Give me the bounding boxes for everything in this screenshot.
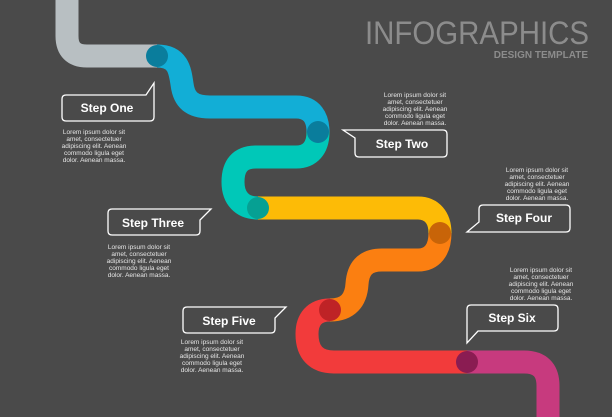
- text: step three: amet, consectetuer: [111, 251, 167, 258]
- text: step two: [383, 92, 448, 127]
- text: step six: adipiscing elit. Aenean: [509, 281, 574, 288]
- callout: Step Six: Step Six: [488, 311, 536, 325]
- text: step three: Lorem ipsum dolor sit: [108, 244, 170, 251]
- text: step five: Lorem ipsum dolor sit: [181, 339, 243, 346]
- text: step one: commodo ligula eget: [64, 150, 124, 157]
- text: step two: dolor. Aenean massa.: [384, 120, 446, 127]
- step nodes: [146, 45, 478, 373]
- text: step five: adipiscing elit. Aenean: [180, 353, 245, 360]
- text: step six: dolor. Aenean massa.: [510, 295, 572, 302]
- text: step one: Lorem ipsum dolor sit: [63, 129, 125, 136]
- text: step three: [107, 244, 172, 279]
- text: step one: [62, 129, 127, 164]
- callout: Step Five: Step Five: [202, 314, 256, 328]
- text: step three: commodo ligula eget: [109, 265, 169, 272]
- callout: Step One: [62, 83, 154, 121]
- text: step two: amet, consectetuer: [387, 99, 443, 106]
- text: step five: amet, consectetuer: [184, 346, 240, 353]
- text: step four: commodo ligula eget: [507, 188, 567, 195]
- callout: Step Two: [343, 130, 447, 157]
- text: step two: adipiscing elit. Aenean: [383, 106, 448, 113]
- text: step six: amet, consectetuer: [513, 274, 569, 281]
- text: step five: dolor. Aenean massa.: [181, 367, 243, 374]
- title: INFOGRAPHICS: [365, 15, 589, 51]
- text: step three: adipiscing elit. Aenean: [107, 258, 172, 265]
- title: DESIGN TEMPLATE: [494, 50, 588, 61]
- text: step one: amet, consectetuer: [66, 136, 122, 143]
- callout: Step Six: [467, 305, 558, 343]
- text: step two: commodo ligula eget: [385, 113, 445, 120]
- text: step four: dolor. Aenean massa.: [506, 195, 568, 202]
- callout: Step Five: [183, 307, 286, 333]
- text: step four: amet, consectetuer: [509, 174, 565, 181]
- text: step six: [509, 267, 574, 302]
- callout: Step Four: Step Four: [496, 211, 552, 225]
- callout: Step Four: [467, 205, 570, 232]
- text: step two: Lorem ipsum dolor sit: [384, 92, 446, 99]
- text: step four: adipiscing elit. Aenean: [505, 181, 570, 188]
- callout: Step Three: Step Three: [122, 216, 184, 230]
- text: step four: Lorem ipsum dolor sit: [506, 167, 568, 174]
- text: step three: dolor. Aenean massa.: [108, 272, 170, 279]
- text: step five: [180, 339, 245, 374]
- callout: Step Three: [108, 209, 211, 235]
- text: step six: commodo ligula eget: [511, 288, 571, 295]
- winding path: [67, 0, 548, 417]
- text: step one: adipiscing elit. Aenean: [62, 143, 127, 150]
- text: step five: commodo ligula eget: [182, 360, 242, 367]
- callout: Step One: Step One: [81, 101, 134, 115]
- text: step four: [505, 167, 570, 202]
- text: step one: dolor. Aenean massa.: [63, 157, 125, 164]
- callout: Step Two: Step Two: [376, 137, 428, 151]
- text: step six: Lorem ipsum dolor sit: [510, 267, 572, 274]
